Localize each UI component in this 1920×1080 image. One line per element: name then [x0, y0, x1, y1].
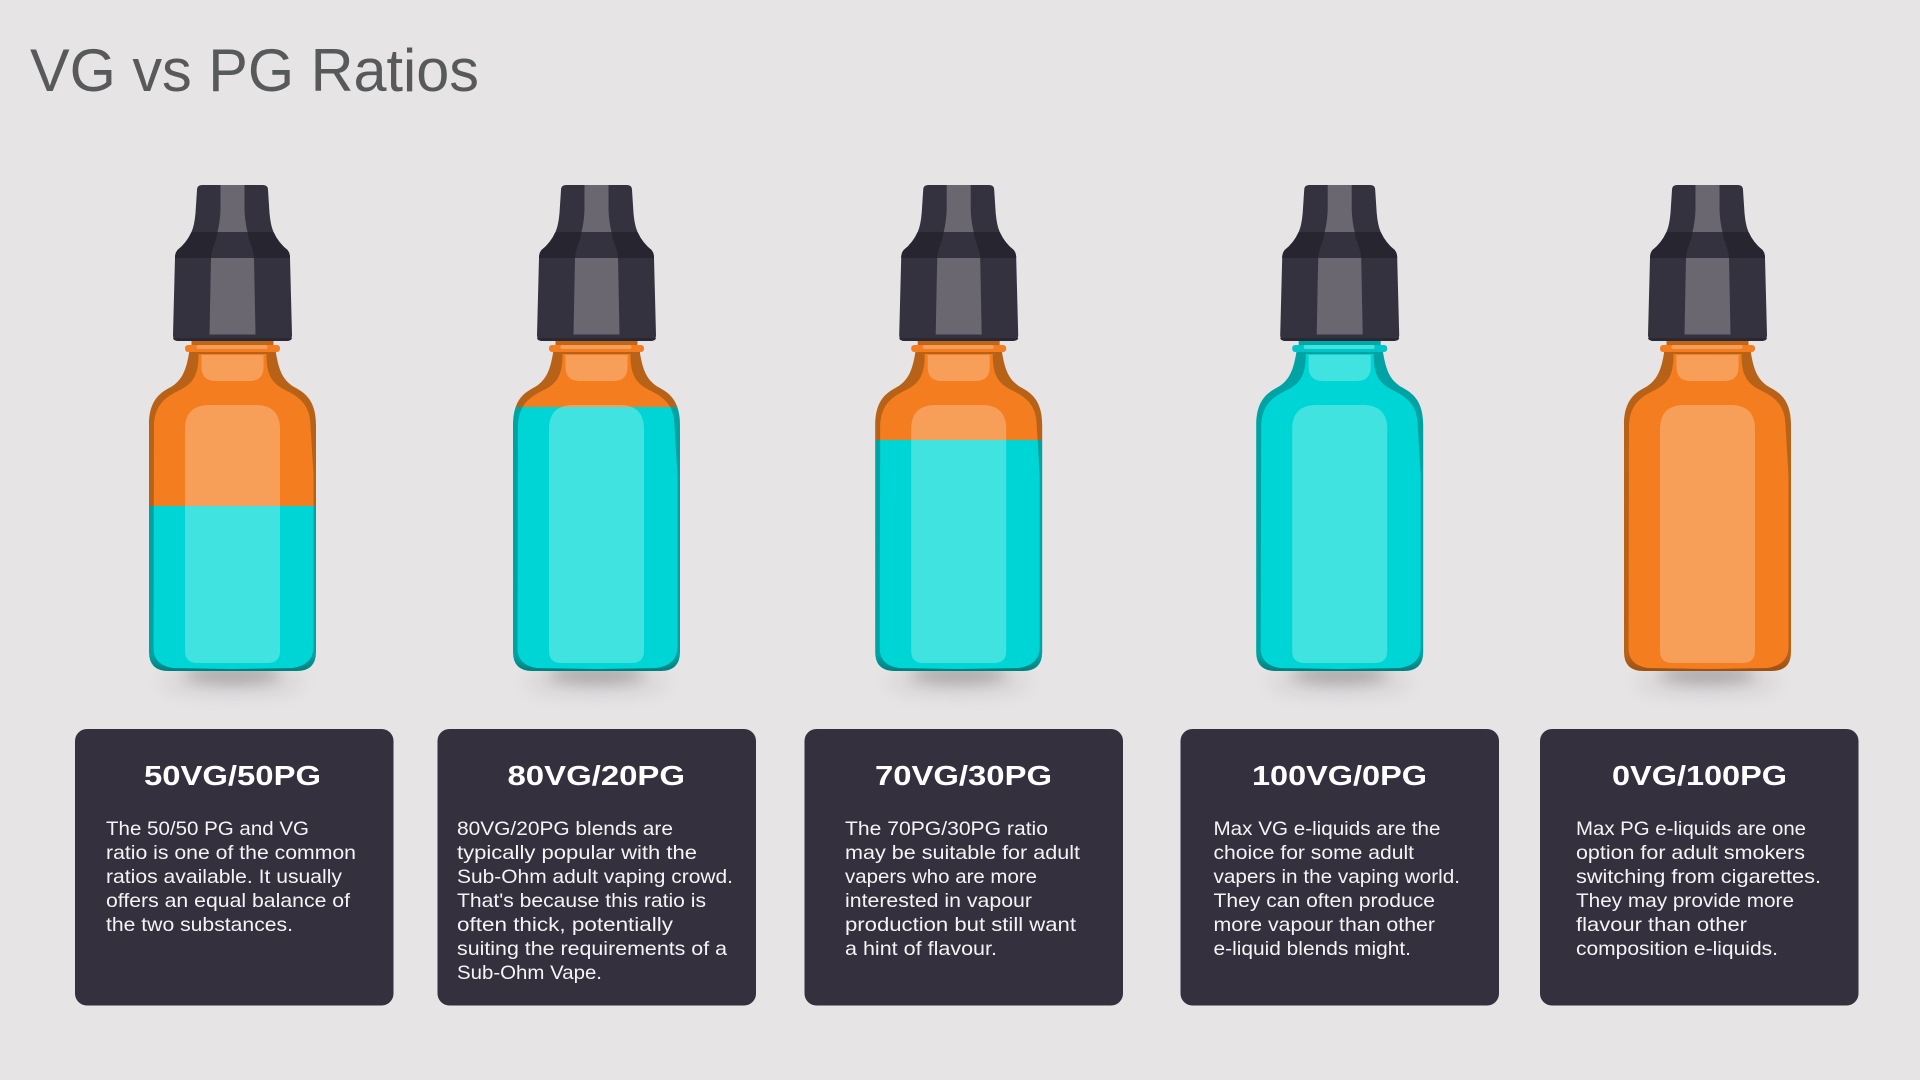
bottle: 100VG/0PG — [1256, 185, 1423, 694]
panel: 100VG/0PG — [1180, 729, 1499, 1006]
card body text: more vapour than other — [1214, 914, 1436, 936]
card body text: switching from cigarettes. — [1576, 866, 1821, 888]
card heading: 100VG/0PG — [1252, 760, 1427, 791]
card body text: production but still want — [845, 914, 1077, 936]
liquid: VG teal lower 80% — [513, 407, 680, 671]
title: VG vs PG Ratios — [30, 37, 479, 104]
card body text — [106, 818, 356, 936]
liquid: VG teal full — [1256, 341, 1423, 671]
bottle shadow — [887, 665, 1031, 694]
card body text: the two substances. — [106, 914, 293, 936]
card body text: They may provide more — [1576, 890, 1794, 912]
card body text: often thick, potentially — [457, 914, 673, 936]
card body text: may be suitable for adult — [845, 842, 1081, 864]
card body text: composition e-liquids. — [1576, 938, 1778, 960]
card body text — [1214, 818, 1460, 960]
bottle: 50VG/50PG — [149, 185, 316, 694]
bottle shadow — [524, 665, 668, 694]
card background — [1540, 729, 1858, 1006]
card body text — [845, 818, 1081, 960]
card body text: The 50/50 PG and VG — [106, 818, 309, 840]
bottle cap — [537, 185, 656, 341]
liquid: VG teal lower 70% — [875, 440, 1042, 671]
liquid: VG teal lower half — [149, 506, 316, 671]
card heading: 80VG/20PG — [508, 760, 685, 791]
card body text: option for adult smokers — [1576, 842, 1805, 864]
liquid: PG orange upper 30% — [875, 341, 1042, 440]
panel: 50VG/50PG — [75, 729, 394, 1006]
card body text: vapers who are more — [845, 866, 1037, 888]
card body text — [457, 818, 733, 984]
card body text: ratio is one of the common — [106, 842, 356, 864]
card background — [1180, 729, 1499, 1006]
bottle: 70VG/30PG — [875, 185, 1042, 694]
card body text: flavour than other — [1576, 914, 1748, 936]
card body text — [1576, 818, 1821, 960]
card body text: Max PG e-liquids are one — [1576, 818, 1806, 840]
card body text: That's because this ratio is — [457, 890, 706, 912]
card body text: vapers in the vaping world. — [1214, 866, 1460, 888]
bottle: 0VG/100PG — [1624, 185, 1791, 694]
bottle shadow — [1268, 665, 1412, 694]
card body text: Max VG e-liquids are the — [1214, 818, 1440, 840]
card body text: Sub-Ohm adult vaping crowd. — [457, 866, 733, 888]
card body text: ratios available. It usually — [106, 866, 342, 888]
panel: 80VG/20PG — [438, 729, 756, 1006]
card body text: a hint of flavour. — [845, 938, 997, 960]
card background — [75, 729, 394, 1006]
card heading: 70VG/30PG — [875, 760, 1052, 791]
liquid: PG orange full — [1624, 341, 1791, 671]
card heading: 0VG/100PG — [1612, 760, 1787, 791]
bottle cap — [899, 185, 1018, 341]
card body text: e-liquid blends might. — [1214, 938, 1411, 960]
panel: 70VG/30PG — [804, 729, 1123, 1006]
card body text: choice for some adult — [1214, 842, 1415, 864]
card body text: Sub-Ohm Vape. — [457, 962, 602, 984]
card body text: offers an equal balance of — [106, 890, 351, 912]
card body text: suiting the requirements of a — [457, 938, 727, 960]
card body text: typically popular with the — [457, 842, 697, 864]
bottle shadow — [160, 665, 304, 694]
card heading: 50VG/50PG — [144, 760, 321, 791]
card body text: 80VG/20PG blends are — [457, 818, 673, 840]
bottle: 80VG/20PG — [513, 185, 680, 694]
liquid: PG orange upper 20% — [516, 341, 678, 407]
card background — [804, 729, 1123, 1006]
card body text: The 70PG/30PG ratio — [845, 818, 1048, 840]
bottle cap — [1280, 185, 1399, 341]
card body text: interested in vapour — [845, 890, 1033, 912]
bottle cap — [173, 185, 292, 341]
panel: 0VG/100PG — [1540, 729, 1858, 1006]
card background — [438, 729, 756, 1006]
card body text: They can often produce — [1214, 890, 1435, 912]
bottle cap — [1648, 185, 1767, 341]
bottle shadow — [1636, 665, 1780, 694]
liquid: PG orange upper half — [148, 341, 316, 506]
